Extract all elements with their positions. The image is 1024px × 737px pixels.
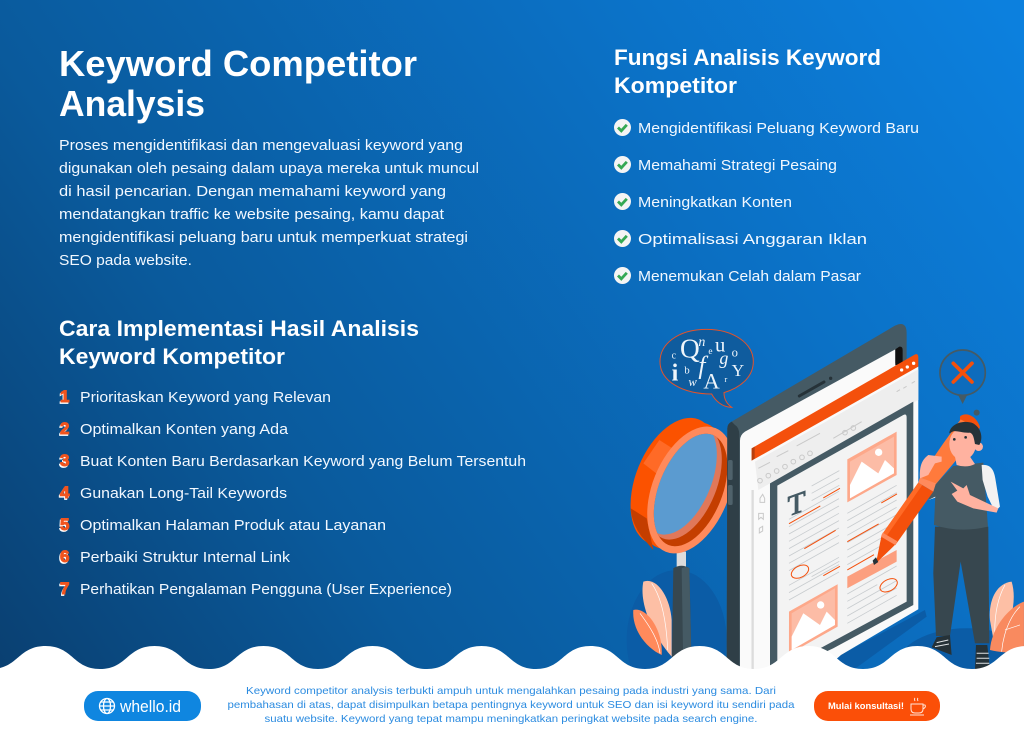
logo pill <box>84 691 201 721</box>
speech bubble with letters: g <box>719 348 728 368</box>
left plant <box>633 581 672 657</box>
speech bubble with letters: Y <box>732 361 745 380</box>
speech bubble with letters <box>660 329 753 407</box>
footer wave <box>0 646 1024 737</box>
list numbers: 3 <box>60 451 69 470</box>
heading: implementation <box>59 316 419 369</box>
list numbers: 6 <box>60 547 69 566</box>
illustration <box>613 324 1024 710</box>
list numbers: 5 <box>59 516 68 536</box>
title: Analysis <box>59 83 205 124</box>
footer summary text <box>228 685 795 725</box>
app window <box>752 354 918 533</box>
magnifying glass <box>613 405 751 670</box>
checklist items: Optimalisasi Anggaran Iklan <box>638 231 867 248</box>
speech bubble with letters: i <box>672 361 679 387</box>
list numbers: 2 <box>60 419 69 438</box>
numbered list <box>59 387 526 600</box>
list items: Perhatikan Pengalaman Pengguna (User Experience) <box>80 581 452 598</box>
pen cap and upper barrel <box>920 410 980 484</box>
letter T: T <box>788 484 806 523</box>
list numbers: 4 <box>60 483 70 502</box>
icon: coffee cup <box>910 698 925 715</box>
hand on pen <box>920 455 942 478</box>
list items: Perbaiki Struktur Internal Link <box>80 549 291 566</box>
list numbers: 7 <box>59 580 68 600</box>
speech bubble with letters: b <box>684 365 690 376</box>
footer summary text: suatu website. Keyword yang tepat mampu meningkatkan peringkat website pada search engine. <box>264 713 758 725</box>
list numbers: 5 <box>60 515 69 534</box>
footer summary text: pembahasan di atas, dapat disimpulkan betapa pentingnya keyword untuk SEO dan isi keyword itu sendiri pada <box>228 699 795 711</box>
intro paragraph: digunakan oleh pesaing dalam upaya mereka untuk muncul <box>59 160 479 177</box>
list numbers: 1 <box>60 387 69 406</box>
shirt <box>928 463 988 530</box>
list numbers: 4 <box>59 484 69 504</box>
heading: functions <box>614 45 881 98</box>
hair <box>949 422 981 445</box>
intro paragraph: mengidentifikasi peluang baru untuk memperkuat strategi <box>59 229 468 246</box>
list numbers: 1 <box>59 388 68 408</box>
speech bubble with letters: c <box>672 350 677 361</box>
checklist items <box>638 120 919 285</box>
footer summary text: Keyword competitor analysis terbukti ampuh untuk mengalahkan pesaing pada industri yang sama. Dari <box>246 685 776 697</box>
sleeve <box>982 465 1000 512</box>
text lines <box>789 471 897 623</box>
checklist items: Memahami Strategi Pesaing <box>638 157 837 174</box>
icon: cross bubble <box>940 350 985 404</box>
list items <box>80 389 526 598</box>
list items: Optimalkan Halaman Produk atau Layanan <box>80 517 386 534</box>
speech bubble with letters: r <box>724 374 727 384</box>
speech bubble with letters: o <box>732 346 738 360</box>
far sleeve <box>928 490 937 500</box>
icon: globe <box>100 698 114 714</box>
image placeholder bottom <box>789 584 838 654</box>
list numbers <box>59 387 70 600</box>
tablet body <box>727 324 918 673</box>
list items: Gunakan Long-Tail Keywords <box>80 485 287 502</box>
list items: Optimalkan Konten yang Ada <box>80 421 289 438</box>
ground shadows <box>627 570 1024 710</box>
speech bubble with letters: n <box>698 335 705 350</box>
list numbers: 6 <box>59 548 68 568</box>
checklist items: Menemukan Celah dalam Pasar <box>638 268 861 285</box>
list items: Prioritaskan Keyword yang Relevan <box>80 389 331 406</box>
intro paragraph: Proses mengidentifikasi dan mengevaluasi keyword yang <box>59 137 463 154</box>
intro paragraph: mendatangkan traffic ke website pesaing, kamu dapat <box>59 206 445 223</box>
logo pill: whello.id <box>119 697 181 716</box>
intro paragraph: di hasil pencarian. Dengan memahami keyword yang <box>59 183 446 200</box>
pen lower barrel <box>873 477 936 565</box>
neck and face <box>955 457 975 466</box>
heading: implementation: Keyword Kompetitor <box>59 344 285 369</box>
speech bubble with letters: w <box>688 375 697 389</box>
speech bubble with letters: Q <box>680 334 700 364</box>
document page <box>770 402 913 673</box>
heading: functions: Kompetitor <box>614 73 737 98</box>
list numbers: 7 <box>60 579 69 598</box>
list numbers: 2 <box>59 420 68 440</box>
red annotations <box>789 488 897 576</box>
arm and hand <box>951 482 998 513</box>
list numbers: 3 <box>59 452 68 472</box>
checklist items: Mengidentifikasi Peluang Keyword Baru <box>638 120 919 137</box>
heading: implementation: Cara Implementasi Hasil Analisis <box>59 316 419 341</box>
heading: functions: Fungsi Analisis Keyword <box>614 45 881 70</box>
pants <box>933 527 989 643</box>
person <box>873 410 1000 670</box>
title <box>59 43 417 124</box>
call to action button: Mulai konsultasi! <box>828 701 904 712</box>
speech bubble with letters: e <box>708 347 712 357</box>
image placeholder top <box>847 432 897 502</box>
right plant <box>990 582 1024 653</box>
speech bubble with letters: u <box>715 335 725 357</box>
list items: Buat Konten Baru Berdasarkan Keyword yang Belum Tersentuh <box>80 453 526 470</box>
intro paragraph <box>59 137 479 269</box>
speech bubble with letters: f <box>698 351 708 379</box>
check icons <box>614 119 631 284</box>
intro paragraph: SEO pada website. <box>59 252 192 269</box>
checklist items: Meningkatkan Konten <box>638 194 792 211</box>
call to action button <box>814 691 940 721</box>
shoes <box>932 635 990 670</box>
title: Keyword Competitor <box>59 43 417 84</box>
speech bubble with letters: A <box>703 368 720 393</box>
checklist <box>614 119 919 285</box>
